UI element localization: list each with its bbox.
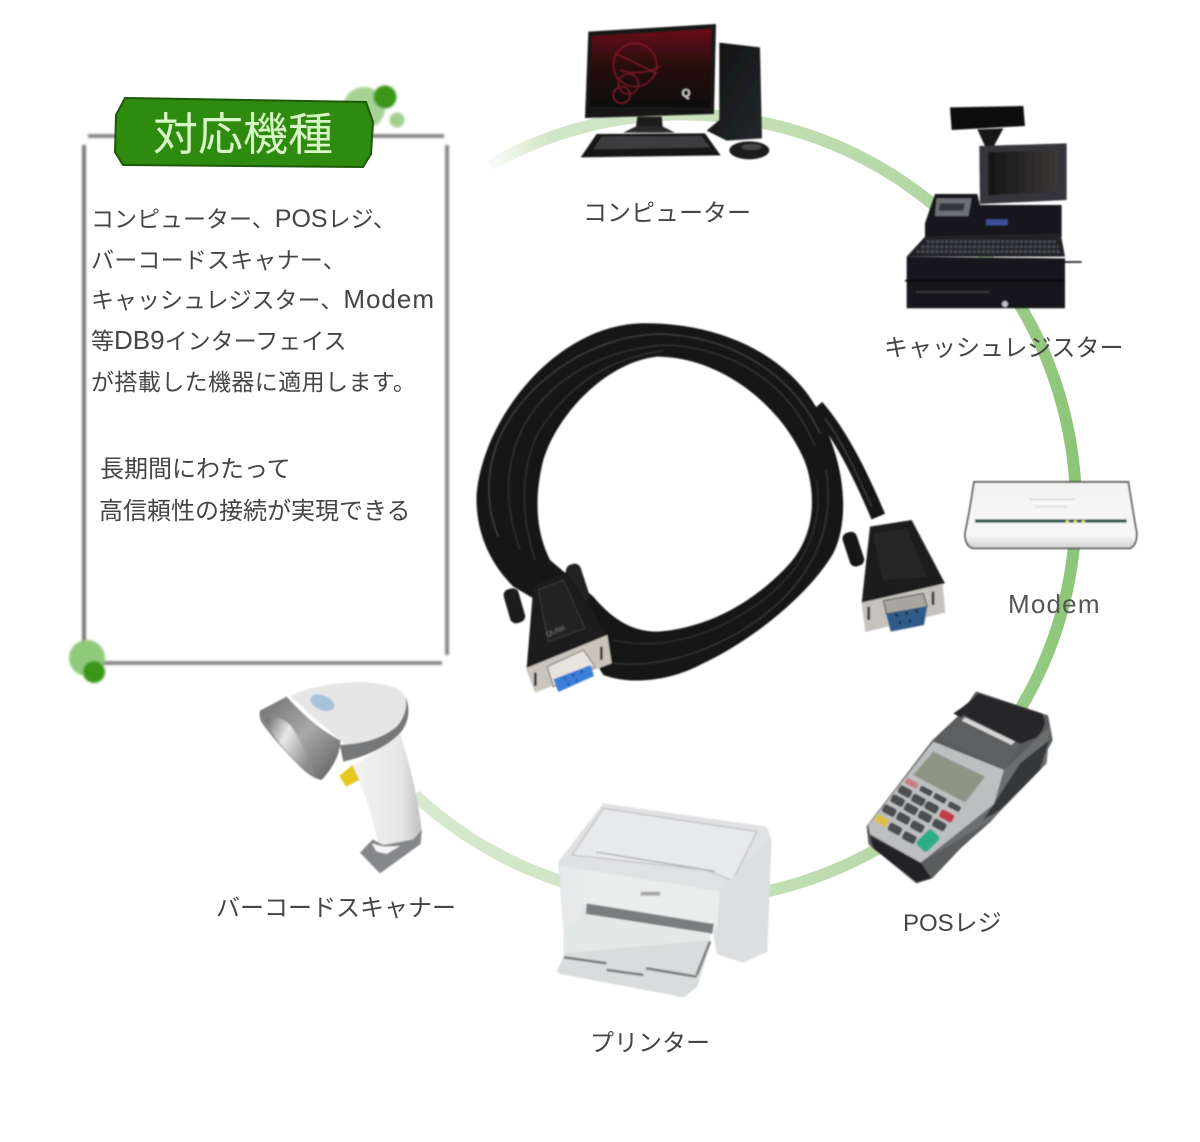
front band bbox=[260, 697, 341, 780]
description text bbox=[91, 205, 435, 525]
monitor bbox=[585, 24, 716, 118]
pole display bbox=[950, 106, 1025, 130]
title: 対応機種 bbox=[153, 109, 333, 160]
icon: desktop computer bbox=[581, 24, 769, 159]
label: barcode scanner: バーコードスキャナー bbox=[216, 895, 456, 922]
description text: が搭載した機器に適用します。 bbox=[91, 369, 416, 395]
description text: キャッシュレジスター、Modem bbox=[91, 284, 435, 314]
front panel bbox=[868, 742, 1004, 863]
cable tail to male connector bbox=[817, 407, 878, 517]
icon: cash register bbox=[905, 106, 1082, 308]
female connector: QLINK bbox=[545, 624, 567, 638]
side shell bbox=[921, 727, 1050, 863]
female connector bbox=[502, 562, 612, 693]
green ring connecting devices bbox=[415, 114, 1076, 900]
male connector bbox=[841, 520, 945, 632]
icon: desktop computer: Q bbox=[682, 88, 691, 100]
touch monitor bbox=[979, 143, 1067, 204]
mouse bbox=[729, 141, 769, 159]
panel: supported devices bbox=[69, 86, 447, 683]
description text: 長期間にわたって bbox=[100, 456, 291, 483]
paper tray bbox=[563, 914, 711, 957]
description text: 等DB9インターフェイス bbox=[91, 325, 347, 355]
logo bbox=[308, 691, 337, 714]
label: computer: コンピューター bbox=[583, 200, 751, 227]
decorative circles bottom bbox=[69, 640, 105, 683]
icon: laser printer bbox=[557, 803, 772, 997]
title banner bbox=[115, 98, 373, 167]
output slot bbox=[586, 903, 714, 934]
base bbox=[360, 829, 422, 873]
LCD bbox=[913, 752, 985, 803]
printer head bbox=[953, 693, 1045, 744]
label: printer: プリンター bbox=[590, 1030, 710, 1057]
tower bbox=[707, 43, 762, 141]
icon: modem bbox=[965, 482, 1137, 548]
description text: コンピューター、POSレジ、 bbox=[91, 205, 396, 233]
keypad bbox=[873, 778, 962, 853]
cable coil bbox=[477, 323, 843, 681]
keypad bbox=[907, 233, 1065, 257]
label: cash register: キャッシュレジスター bbox=[884, 335, 1124, 362]
base bbox=[870, 836, 932, 882]
keyboard bbox=[581, 133, 721, 157]
description text: 高信頼性の接続が実現できる bbox=[99, 498, 411, 525]
head bbox=[290, 682, 407, 746]
stand bbox=[635, 117, 663, 133]
description text: バーコードスキャナー、 bbox=[91, 247, 346, 273]
decorative circles top bbox=[343, 86, 404, 129]
register body bbox=[925, 194, 1062, 238]
DB9 serial cable bbox=[477, 323, 945, 693]
trigger bbox=[339, 765, 359, 787]
label: modem: Modem bbox=[1008, 589, 1101, 619]
icon: POS terminal bbox=[868, 693, 1051, 882]
handle bbox=[353, 733, 422, 845]
cash drawer bbox=[907, 257, 1065, 308]
icon: barcode scanner bbox=[260, 682, 422, 873]
panel frame bbox=[84, 136, 447, 663]
label: POS register: POSレジ bbox=[903, 910, 1002, 937]
